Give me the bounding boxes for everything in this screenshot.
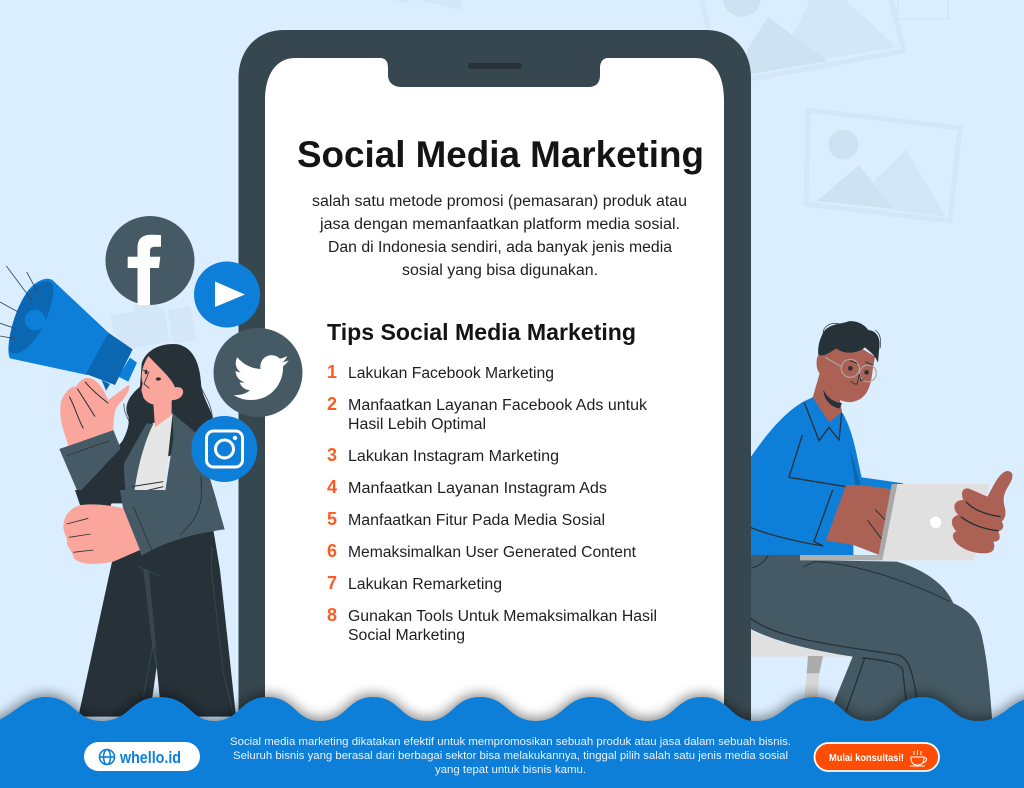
footer band <box>0 694 1024 788</box>
face <box>141 356 183 405</box>
tip 4: Manfaatkan Layanan Instagram Ads <box>348 480 607 497</box>
glasses <box>825 357 876 382</box>
tip 1: 1 <box>327 362 337 382</box>
jacket <box>78 417 153 503</box>
consult button: Mulai konsultasi! <box>829 752 904 764</box>
tip 2: Manfaatkan Layanan Facebook Ads untuk <box>348 397 647 414</box>
lower jacket and hand <box>63 490 225 564</box>
neck and face <box>813 367 842 423</box>
hair <box>818 321 880 363</box>
tip 3: Lakukan Instagram Marketing <box>348 448 559 465</box>
wave shadow <box>0 694 1024 787</box>
icon: instagram <box>191 416 257 482</box>
icon: twitter <box>214 328 302 417</box>
whello logo pill: whello.id <box>119 748 181 767</box>
tip 6: Memaksimalkan User Generated Content <box>348 544 637 561</box>
tip 1: Lakukan Facebook Marketing <box>348 365 554 382</box>
footer text: Social media marketing dikatakan efektif untuk mempromosikan sebuah produk atau jasa dalam sebuah bisnis. <box>230 736 791 748</box>
trousers <box>78 530 236 717</box>
footer text: Seluruh bisnis yang berasal dari berbagai sektor bisa melakukannya, tinggal pilih salah satu jenis media sosial <box>233 750 788 762</box>
tip 5: Manfaatkan Fitur Pada Media Sosial <box>348 512 605 529</box>
intro paragraph: salah satu metode promosi (pemasaran) produk atau <box>312 193 687 210</box>
sweater <box>740 397 903 555</box>
background image frames <box>393 0 960 221</box>
trousers upper <box>740 553 953 603</box>
wave <box>0 697 1024 788</box>
phone body <box>238 30 751 760</box>
whello logo pill <box>84 742 200 771</box>
tip 8: Social Marketing <box>348 627 465 644</box>
faint like icon <box>110 303 197 350</box>
megaphone <box>0 266 137 391</box>
hair back <box>117 344 213 467</box>
phone speaker <box>468 63 522 69</box>
tip 4: 4 <box>327 477 337 497</box>
tip 8: 8 <box>327 605 337 625</box>
tip 5: 5 <box>327 509 337 529</box>
icon: play <box>194 262 260 328</box>
consult button <box>814 743 939 771</box>
tip 2 <box>327 394 647 433</box>
tip 8 <box>327 605 657 644</box>
intro paragraph: Dan di Indonesia sendiri, ada banyak jenis media <box>328 239 672 256</box>
footer text <box>230 736 791 776</box>
intro paragraph: sosial yang bisa digunakan. <box>402 262 598 279</box>
tip 7: 7 <box>327 573 337 593</box>
tip 2: Hasil Lebih Optimal <box>348 416 486 433</box>
woman with megaphone <box>0 266 236 717</box>
title: Social Media Marketing <box>297 134 704 175</box>
tips list <box>327 362 657 644</box>
torso <box>0 266 217 503</box>
raised hand <box>60 378 129 446</box>
man sitting with laptop <box>740 321 1012 727</box>
footer text: yang tepat untuk bisnis kamu. <box>435 764 586 776</box>
icon: coffee cup <box>910 750 927 766</box>
tip 6: 6 <box>327 541 337 561</box>
tip 2: 2 <box>327 394 337 414</box>
intro paragraph: jasa dengan memanfaatkan platform media sosial. <box>319 216 680 233</box>
laptop <box>800 555 883 560</box>
icon: facebook <box>106 216 194 305</box>
tips heading: Tips Social Media Marketing <box>327 319 636 345</box>
intro paragraph <box>312 193 687 279</box>
tip 8: Gunakan Tools Untuk Memaksimalkan Hasil <box>348 608 657 625</box>
shirt <box>131 413 173 502</box>
phone screen <box>265 58 724 760</box>
chair and trousers <box>745 590 993 727</box>
phone frame <box>238 30 751 760</box>
tip 7: Lakukan Remarketing <box>348 576 502 593</box>
tip 3: 3 <box>327 445 337 465</box>
sweater lines <box>804 403 842 441</box>
thumbs up hand <box>952 471 1012 553</box>
left hand <box>826 485 897 557</box>
neck <box>153 400 172 427</box>
icon: globe <box>99 750 115 764</box>
